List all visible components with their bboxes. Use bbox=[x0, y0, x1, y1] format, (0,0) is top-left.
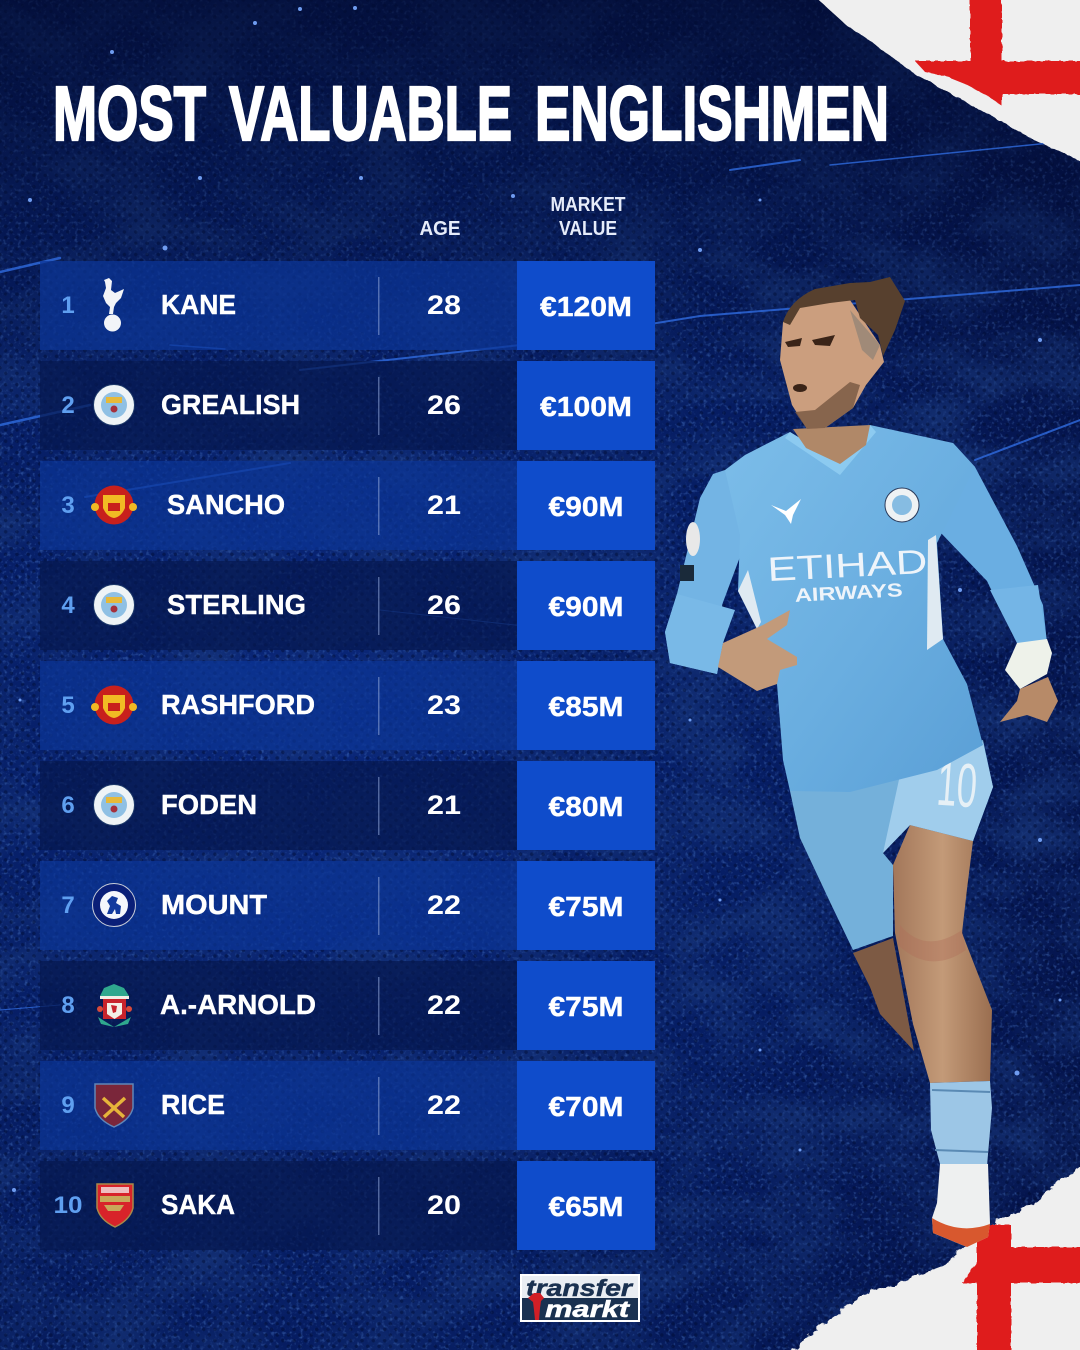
row 1: Kane: KANE bbox=[161, 289, 236, 320]
row 1: Kane: 28 bbox=[427, 290, 461, 320]
row 7: Mount: €75M bbox=[548, 891, 624, 922]
icon: Liverpool crest bbox=[97, 984, 132, 1027]
row 8: Alexander-Arnold: A.-ARNOLD bbox=[160, 989, 316, 1020]
row 3: Sancho: 21 bbox=[427, 490, 461, 520]
text: sponsor bbox=[767, 543, 928, 607]
left hand bbox=[718, 610, 797, 691]
shirt side panels bbox=[738, 535, 943, 650]
eyes and mouth bbox=[785, 335, 835, 392]
player: Jack Grealish bbox=[665, 277, 1058, 1247]
row 6: Foden: 21 bbox=[427, 790, 461, 820]
row 10: Saka: 20 bbox=[427, 1190, 461, 1220]
row 2: Grealish: 2 bbox=[61, 392, 75, 419]
back leg bbox=[853, 938, 914, 1051]
row 6: Foden: 6 bbox=[61, 792, 75, 819]
row 4: Sterling: 4 bbox=[61, 592, 75, 619]
row 5: Rashford: €85M bbox=[548, 691, 624, 722]
row 5: Rashford: RASHFORD bbox=[161, 689, 315, 720]
column header: age: AGE bbox=[420, 218, 460, 240]
head bbox=[780, 300, 884, 429]
row 9: Rice: 9 bbox=[61, 1092, 75, 1119]
column header: market value: VALUE bbox=[559, 218, 617, 240]
logo: Transfermarkt bbox=[520, 1274, 640, 1322]
icon: Manchester City crest bbox=[94, 384, 134, 426]
row 7: Mount: 22 bbox=[427, 890, 461, 920]
row 10: Saka: 10 bbox=[54, 1192, 82, 1219]
row 5: Rashford: 23 bbox=[427, 690, 461, 720]
icon: Arsenal crest bbox=[97, 1184, 133, 1227]
row 4: Sterling: 26 bbox=[427, 590, 461, 620]
row 8: Alexander-Arnold: 22 bbox=[427, 990, 461, 1020]
boot bbox=[932, 1164, 990, 1247]
left sleeve bbox=[665, 470, 760, 674]
row 9: Rice bbox=[40, 1061, 655, 1150]
row 8: Alexander-Arnold: 8 bbox=[61, 992, 75, 1019]
title: VALUABLE bbox=[229, 71, 512, 157]
title bbox=[53, 71, 889, 157]
flag: England bottom corner bbox=[784, 1160, 1080, 1350]
row 1: Kane: 1 bbox=[61, 292, 75, 319]
row 9: Rice: 22 bbox=[427, 1090, 461, 1120]
row 7: Mount: 7 bbox=[61, 892, 75, 919]
row 6: Foden bbox=[40, 761, 655, 850]
torso jersey bbox=[725, 425, 983, 792]
icon: Tottenham crest bbox=[103, 278, 124, 332]
row 3: Sancho: SANCHO bbox=[167, 489, 285, 520]
sleeve patch bbox=[680, 522, 700, 581]
row 2: Grealish: €100M bbox=[540, 391, 632, 422]
icon: West Ham crest bbox=[95, 1084, 133, 1127]
row 2: Grealish: 26 bbox=[427, 390, 461, 420]
row 9: Rice: RICE bbox=[161, 1089, 225, 1120]
text: sponsor: ETIHAD bbox=[767, 543, 928, 589]
row 10: Saka bbox=[40, 1161, 655, 1250]
hair bbox=[783, 277, 905, 356]
row 8: Alexander-Arnold: €75M bbox=[548, 991, 624, 1022]
row 6: Foden: FODEN bbox=[161, 789, 257, 820]
row 3: Sancho: 3 bbox=[61, 492, 75, 519]
row 7: Mount bbox=[40, 861, 655, 950]
row 7: Mount: MOUNT bbox=[161, 889, 267, 920]
shorts bbox=[790, 740, 993, 950]
title: MOST bbox=[53, 71, 206, 157]
icon: Manchester United crest bbox=[91, 686, 137, 724]
icon: Manchester City crest bbox=[94, 584, 134, 626]
right sleeve bbox=[940, 443, 1047, 643]
flag: England top corner bbox=[808, 0, 1080, 165]
row 8: Alexander-Arnold bbox=[40, 961, 655, 1050]
row 4: Sterling: STERLING bbox=[167, 589, 306, 620]
icon: Chelsea crest bbox=[92, 884, 136, 926]
sock bbox=[930, 1081, 992, 1166]
right wrist wrap and hand bbox=[1000, 639, 1058, 722]
row 3: Sancho bbox=[40, 461, 655, 550]
row 5: Rashford: 5 bbox=[61, 692, 75, 719]
row 5: Rashford bbox=[40, 661, 655, 750]
row 2: Grealish: GREALISH bbox=[161, 389, 300, 420]
neck bbox=[793, 425, 870, 464]
logo: Transfermarkt: markt bbox=[545, 1296, 631, 1322]
column header: market value: MARKET bbox=[550, 194, 626, 216]
icon: Manchester United crest bbox=[91, 486, 137, 524]
row 10: Saka: €65M bbox=[548, 1191, 624, 1222]
row 4: Sterling bbox=[40, 561, 655, 650]
row 9: Rice: €70M bbox=[548, 1091, 624, 1122]
text: sponsor: AIRWAYS bbox=[794, 580, 903, 607]
row 1: Kane bbox=[40, 261, 655, 350]
row 1: Kane: €120M bbox=[540, 291, 632, 322]
shirt crest and logo bbox=[771, 488, 919, 524]
text: shorts number: 10 bbox=[935, 750, 979, 821]
front leg bbox=[893, 825, 992, 1083]
beard bbox=[795, 382, 860, 429]
icon: Manchester City crest bbox=[94, 784, 134, 826]
logo: Transfermarkt: transfer bbox=[526, 1275, 633, 1301]
row 4: Sterling: €90M bbox=[548, 591, 624, 622]
row 10: Saka: SAKA bbox=[161, 1189, 235, 1220]
row 3: Sancho: €90M bbox=[548, 491, 624, 522]
column header: market value bbox=[550, 194, 626, 240]
left forearm bbox=[665, 594, 735, 674]
title: ENGLISHMEN bbox=[535, 71, 889, 157]
shaved side of head bbox=[850, 310, 880, 360]
row 2: Grealish bbox=[40, 361, 655, 450]
row 6: Foden: €80M bbox=[548, 791, 624, 822]
